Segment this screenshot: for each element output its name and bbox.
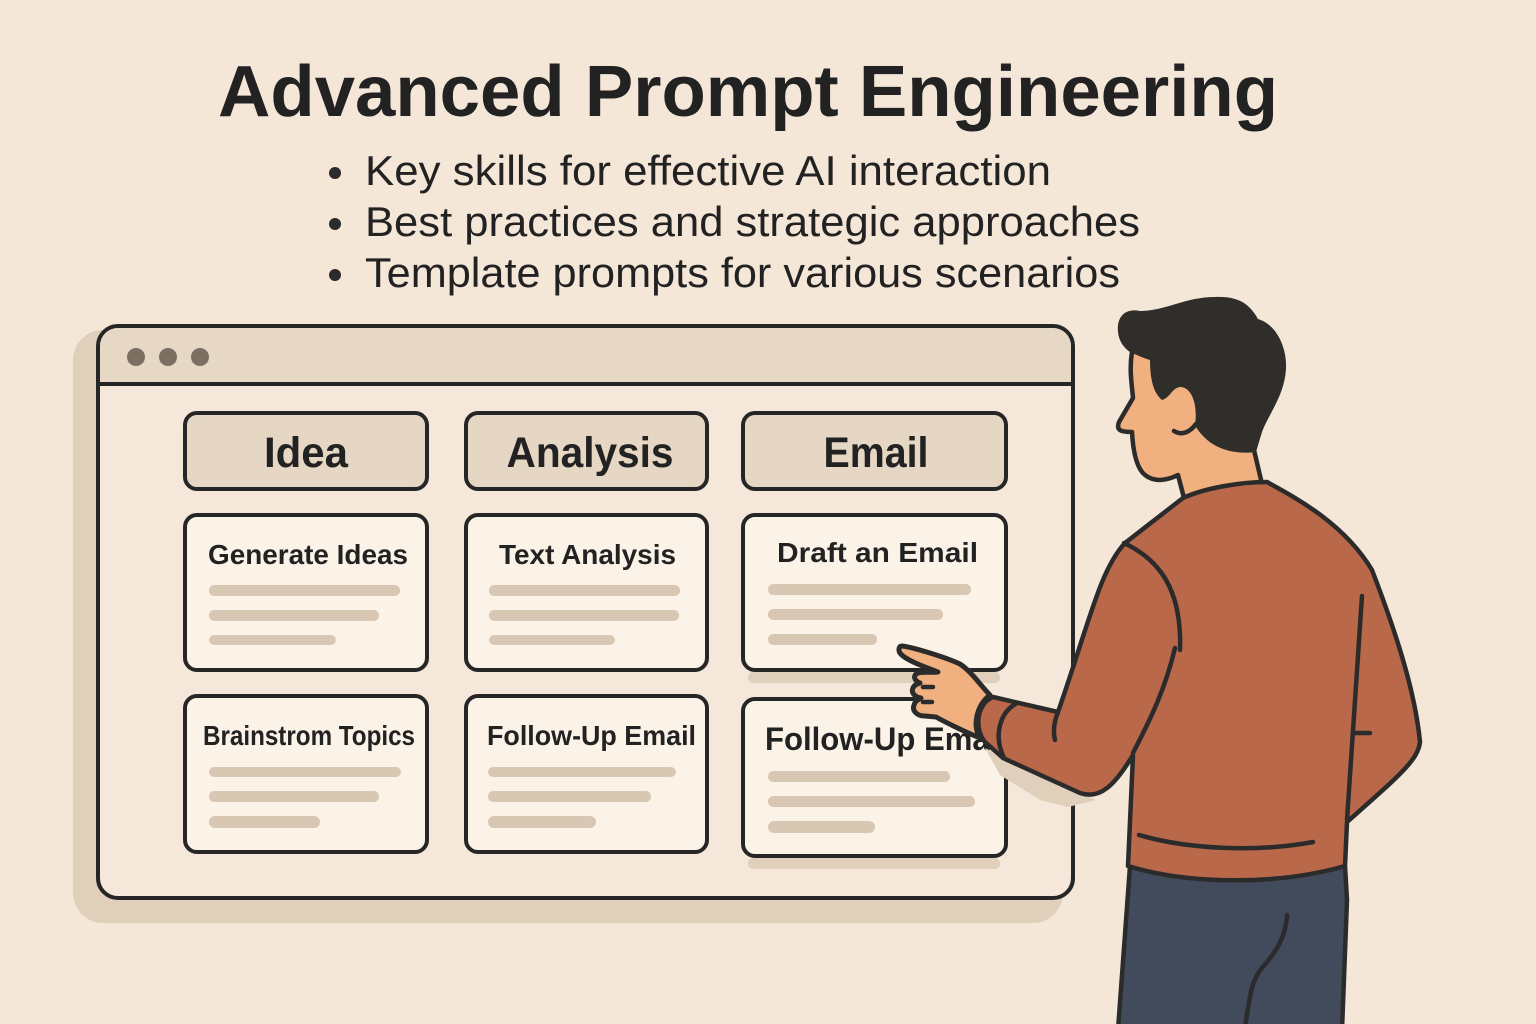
- person: neck and face: [1118, 340, 1262, 498]
- person: sweater: [978, 482, 1420, 880]
- person: trousers: [1118, 866, 1347, 1024]
- category tab: Email: [743, 413, 1006, 489]
- category tab: Idea: Idea: [264, 429, 349, 477]
- card: Follow-Up Email partially covered: [743, 699, 1007, 856]
- card: Follow-Up Email: Follow-Up Email: [487, 720, 696, 751]
- card: Brainstrom Topics: Brainstrom Topics: [203, 720, 415, 751]
- bullet list: Best practices and strategic approaches: [365, 198, 1140, 245]
- card: Generate Ideas: Generate Ideas: [208, 539, 408, 570]
- person: [899, 297, 1420, 1024]
- card: Draft an Email: Draft an Email: [777, 537, 978, 568]
- browser window: [98, 326, 1073, 898]
- browser window shadow: [73, 330, 1063, 923]
- person: pointing hand: [899, 646, 990, 738]
- card: Text Analysis: [466, 515, 707, 670]
- card: Generate Ideas: [185, 515, 427, 670]
- card shadow: [748, 672, 1000, 683]
- card: Brainstrom Topics: [185, 696, 427, 852]
- card: Text Analysis: Text Analysis: [499, 539, 676, 570]
- category tab: Analysis: Analysis: [506, 429, 674, 477]
- bullet list: Key skills for effective AI interaction: [365, 147, 1051, 194]
- bullet list: Template prompts for various scenarios: [365, 249, 1120, 296]
- ear detail: [1174, 424, 1196, 433]
- card: Follow-Up Email: [466, 696, 707, 852]
- category tab: Email: Email: [824, 429, 928, 477]
- category tab: Analysis: [466, 413, 707, 489]
- person: hair: [1118, 297, 1286, 453]
- title: Advanced Prompt Engineering: [218, 52, 1278, 132]
- card: Follow-Up Email partially covered: Follow-Up Email: [765, 721, 1007, 757]
- card: Draft an Email: [743, 515, 1006, 670]
- sweater details: [999, 543, 1370, 848]
- bullet list: [329, 147, 1140, 296]
- card shadow: [748, 858, 1000, 869]
- trouser crease: [1245, 915, 1287, 1024]
- category tab: Idea: [185, 413, 427, 489]
- finger separators: [923, 687, 933, 702]
- person: arm shadow: [985, 748, 1096, 807]
